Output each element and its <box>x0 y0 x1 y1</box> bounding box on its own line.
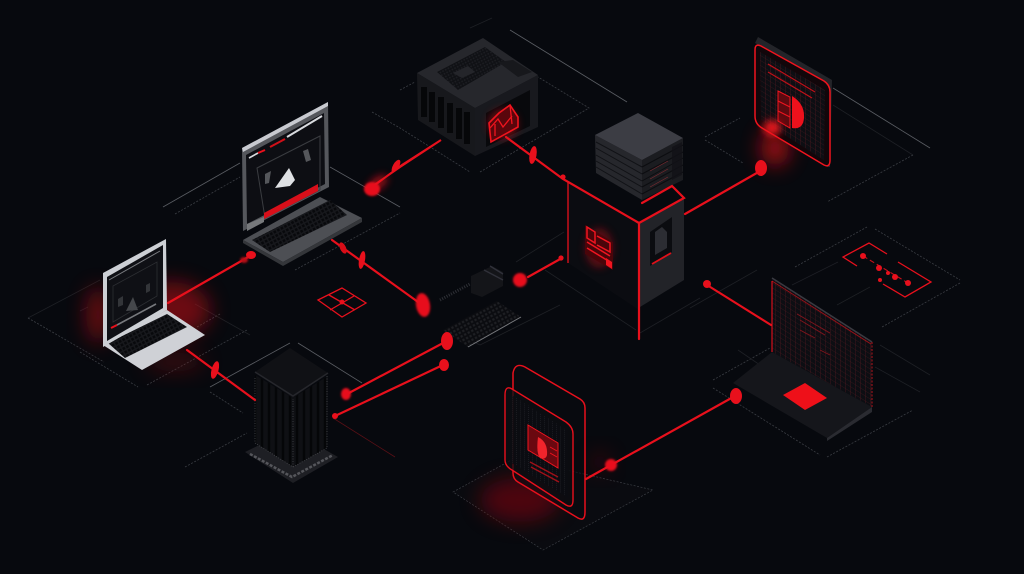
panel icon <box>778 91 790 128</box>
card icon <box>528 425 559 482</box>
small map icon <box>318 288 366 317</box>
front card <box>505 388 573 506</box>
laptop center screen <box>242 102 329 231</box>
mouse device <box>440 266 503 300</box>
laptop left <box>103 239 205 370</box>
connector: center laptop to node <box>332 240 432 318</box>
appliance box <box>417 38 538 156</box>
laptop right screen <box>772 278 872 407</box>
laptop center <box>242 102 362 266</box>
connector: tower upper <box>341 332 453 400</box>
block left face <box>568 182 639 310</box>
panel glow <box>763 120 781 136</box>
box top <box>417 38 538 108</box>
flow diagram icon right <box>843 243 931 297</box>
tower left face <box>255 375 293 467</box>
keyboard device <box>443 301 521 347</box>
connector: block to top panel <box>685 160 767 214</box>
laptop left keyboard <box>108 314 187 358</box>
server stack <box>595 113 683 200</box>
tower top <box>255 348 328 398</box>
panel floor: bottom document <box>453 458 653 550</box>
icon: red house <box>488 105 518 142</box>
ground lines <box>28 18 960 467</box>
back card <box>513 365 585 519</box>
document panel top right <box>755 37 832 167</box>
panel back edge <box>755 37 832 167</box>
laptop center keyboard <box>252 200 347 252</box>
connector: tower lower <box>332 359 449 419</box>
red trackpad <box>783 383 827 410</box>
block window <box>650 217 672 266</box>
document card bottom <box>505 365 585 519</box>
connector: right laptop to card <box>586 388 742 479</box>
connector: block to mouse <box>513 255 564 287</box>
glows <box>86 130 789 522</box>
tower <box>245 348 338 483</box>
box right face <box>475 75 538 156</box>
laptop center base <box>243 197 362 262</box>
connector: laptop to center laptop <box>168 251 256 303</box>
stack right face <box>642 138 683 200</box>
connector: blob to box <box>364 140 441 196</box>
stack left face <box>595 135 642 200</box>
box left face <box>417 73 475 156</box>
screen triangle icon <box>275 168 295 188</box>
connector: laptop to tower <box>187 350 255 400</box>
laptop right base <box>733 352 872 438</box>
tower right face <box>293 376 328 467</box>
red strip <box>264 184 318 219</box>
stack top <box>595 113 683 160</box>
server block <box>568 182 684 310</box>
block red panel icon <box>585 225 613 270</box>
panel face <box>755 45 830 166</box>
connectors <box>168 137 771 479</box>
tower base <box>245 430 338 483</box>
laptop left screen <box>103 239 167 347</box>
connector: node to right laptop <box>703 280 771 325</box>
block right face <box>639 198 684 307</box>
laptop right <box>733 278 872 441</box>
laptop left base <box>103 310 205 370</box>
connector: box to block <box>506 137 684 339</box>
